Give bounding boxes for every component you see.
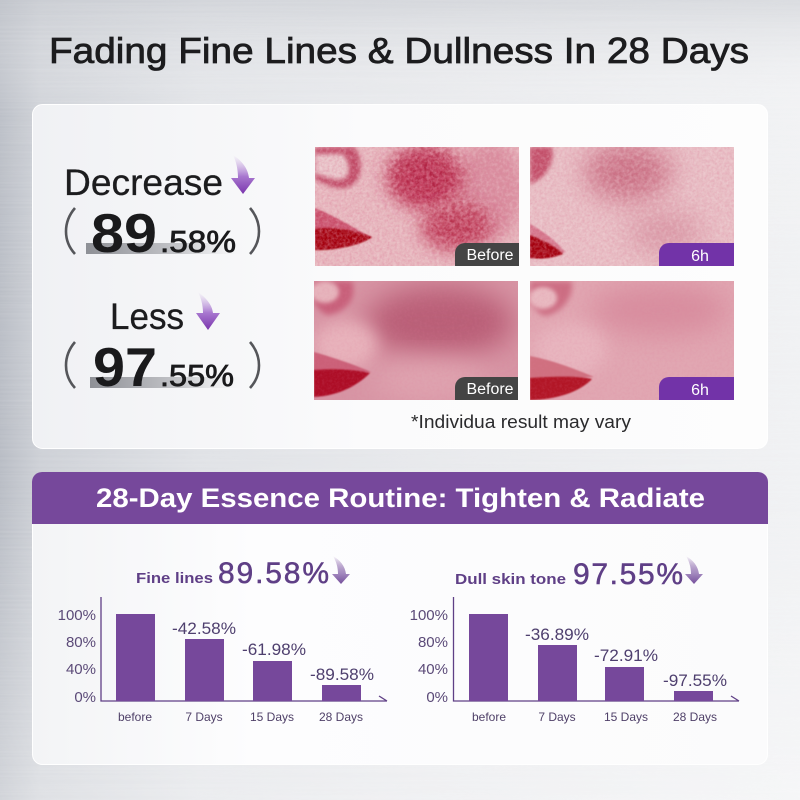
icon: arrow down xyxy=(332,556,350,584)
icon: arrow down xyxy=(231,155,255,194)
x labels: before xyxy=(472,710,506,724)
chart title: 89.58% xyxy=(218,557,329,590)
badge xyxy=(455,243,519,266)
stat: decrease: Decrease xyxy=(64,162,223,203)
left bracket xyxy=(66,208,75,254)
badge xyxy=(659,377,734,400)
stat: less: Less xyxy=(110,296,184,337)
axes xyxy=(101,597,387,701)
stat: less xyxy=(66,292,259,398)
y labels: 80% xyxy=(418,634,448,651)
photo: after 1 xyxy=(530,144,734,266)
x labels xyxy=(472,710,717,724)
badge: Before xyxy=(466,381,514,398)
y labels: 100% xyxy=(58,607,96,624)
icon: arrow down xyxy=(685,556,703,584)
x labels: 7 Days xyxy=(185,710,223,724)
decimals: .55% xyxy=(160,358,234,393)
disclaimer: *Individua result may vary xyxy=(411,412,631,432)
x labels xyxy=(118,710,363,724)
value labels xyxy=(172,619,374,684)
chart: fine lines xyxy=(58,556,387,724)
badge: Before xyxy=(466,247,514,264)
panel: results xyxy=(32,104,768,448)
badge xyxy=(659,243,734,266)
value labels: -89.58% xyxy=(310,665,374,684)
stat: decrease xyxy=(64,155,259,264)
x labels: 15 Days xyxy=(604,710,648,724)
photo: before 1 xyxy=(315,140,524,266)
y labels: 0% xyxy=(74,689,96,706)
chart title xyxy=(136,557,329,590)
axes xyxy=(454,597,739,701)
header bar: 28-Day Essence Routine: Tighten & Radiate xyxy=(96,483,705,513)
y labels: 0% xyxy=(426,689,448,706)
x labels: 7 Days xyxy=(538,710,576,724)
value labels xyxy=(525,625,727,690)
left bracket xyxy=(66,342,75,388)
badge: 6h xyxy=(691,382,709,399)
highlight bar xyxy=(86,243,242,254)
y labels: 80% xyxy=(66,634,96,651)
y labels: 40% xyxy=(66,661,96,678)
figure: 97 xyxy=(93,336,157,398)
x labels: before xyxy=(118,710,152,724)
value labels: -36.89% xyxy=(525,625,589,644)
x labels: 15 Days xyxy=(250,710,294,724)
value labels: -97.55% xyxy=(663,671,727,690)
right bracket xyxy=(250,208,259,254)
chart title xyxy=(455,558,683,591)
value labels: -42.58% xyxy=(172,619,236,638)
value labels: -72.91% xyxy=(594,646,658,665)
y labels: 40% xyxy=(418,661,448,678)
header bar xyxy=(32,472,768,524)
photo: before 2 xyxy=(311,281,518,400)
decimals: .58% xyxy=(160,224,236,259)
panel: routine xyxy=(32,472,768,764)
photo: after 2 xyxy=(529,281,734,400)
y labels xyxy=(58,607,96,706)
bars xyxy=(116,614,361,701)
y labels xyxy=(410,607,448,706)
badge: 6h xyxy=(691,248,709,265)
chart title: Fine lines xyxy=(136,570,213,587)
chart title: Dull skin tone xyxy=(455,571,566,588)
chart title: 97.55% xyxy=(573,558,683,591)
badge xyxy=(455,377,518,400)
bars xyxy=(469,614,713,701)
icon: arrow down xyxy=(196,292,220,330)
x labels: 28 Days xyxy=(319,710,363,724)
value labels: -61.98% xyxy=(242,640,306,659)
right bracket xyxy=(250,342,259,388)
highlight bar xyxy=(90,377,242,388)
title: Fading Fine Lines & Dullness In 28 Days xyxy=(49,30,749,71)
figure: 89 xyxy=(91,202,157,264)
chart: dull skin tone xyxy=(410,556,739,724)
y labels: 100% xyxy=(410,607,448,624)
x labels: 28 Days xyxy=(673,710,717,724)
